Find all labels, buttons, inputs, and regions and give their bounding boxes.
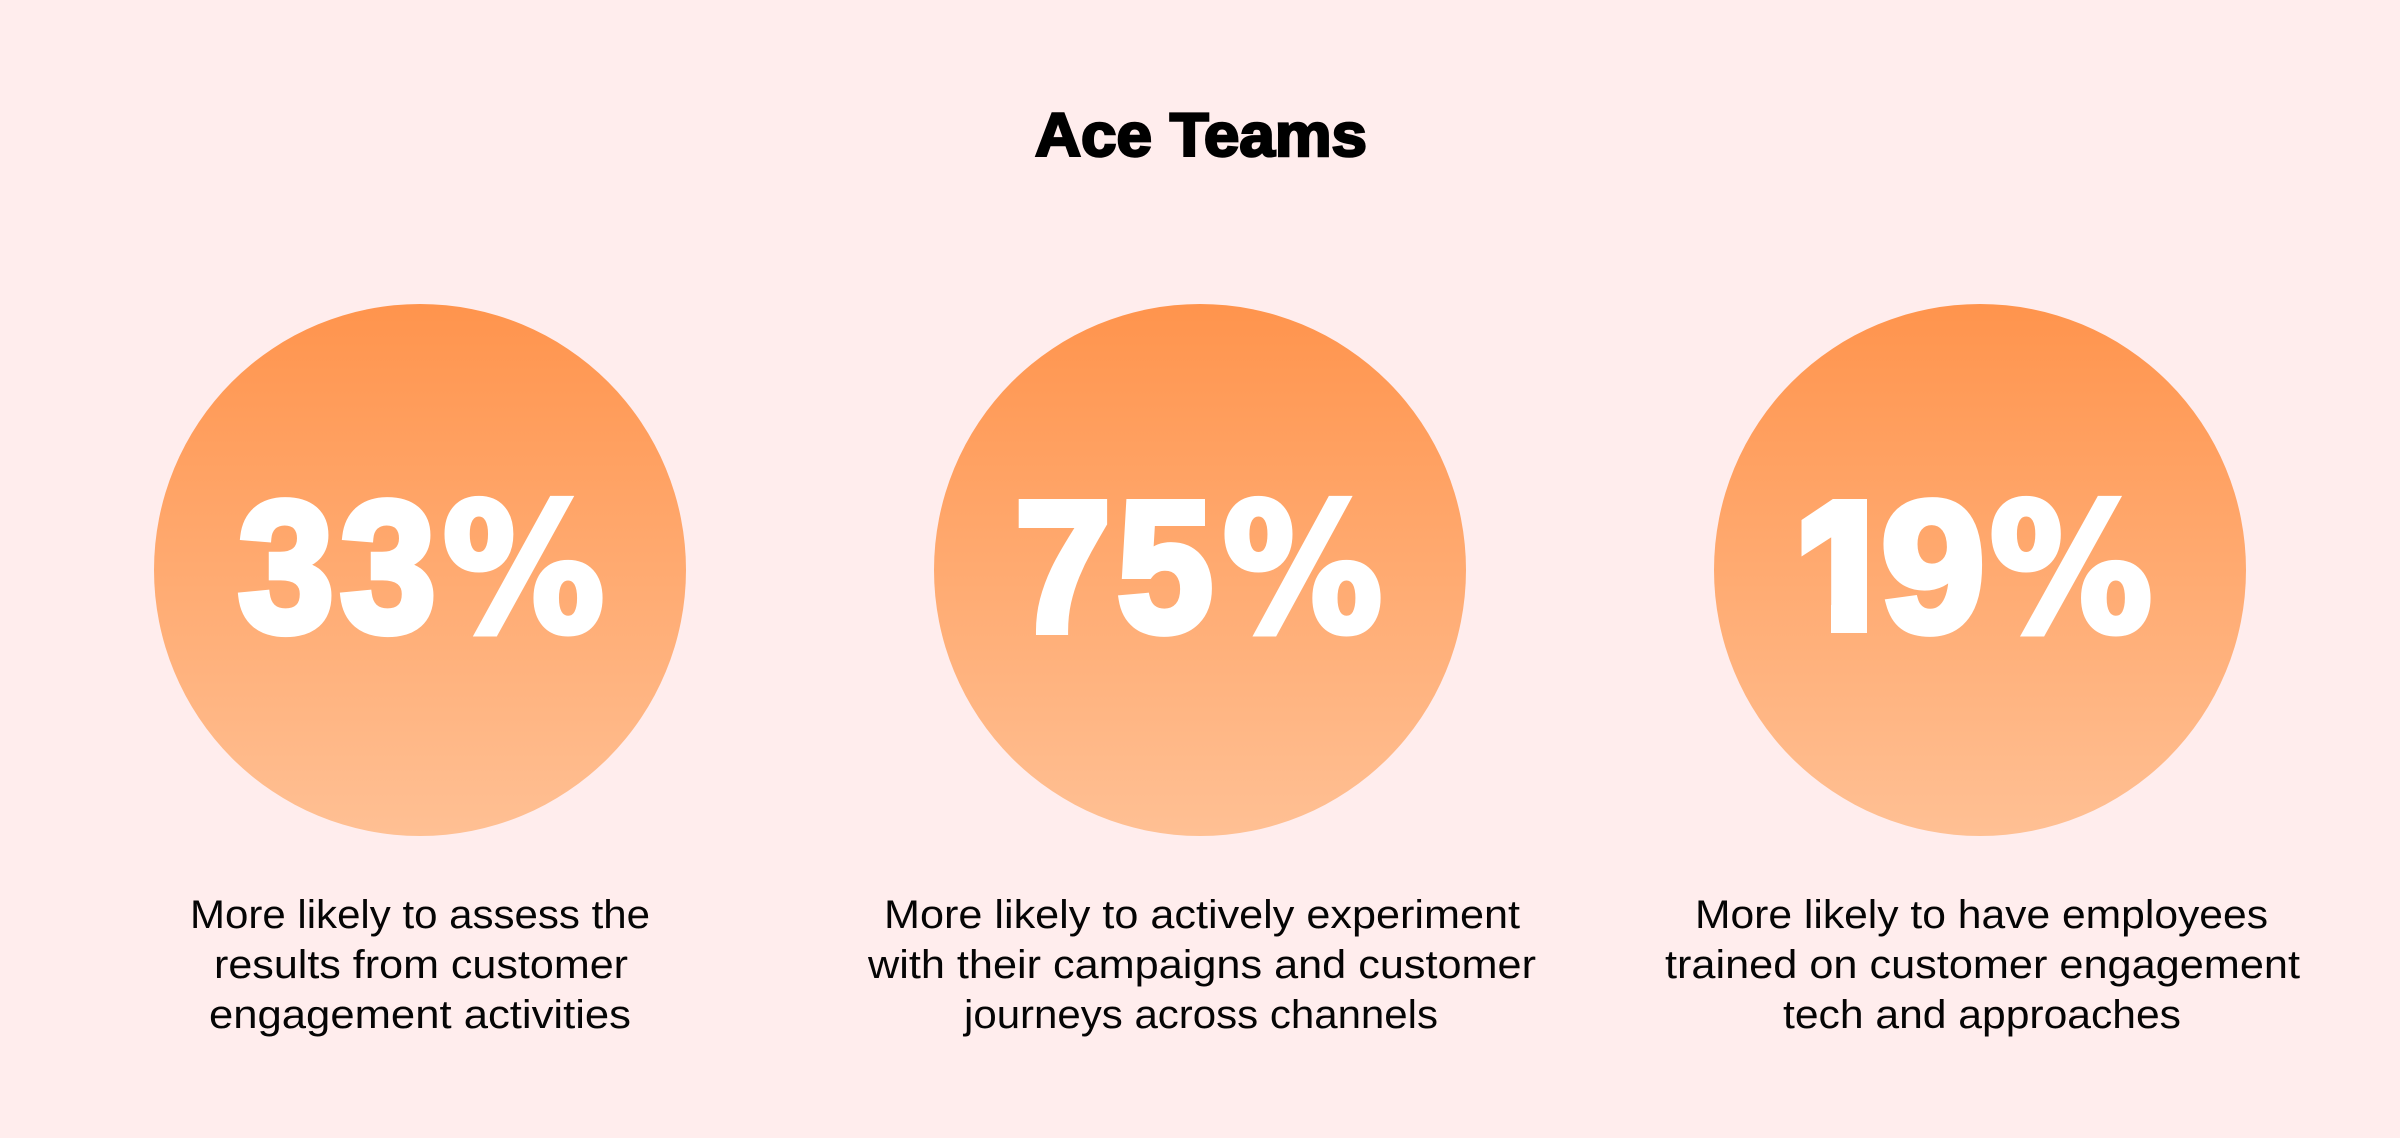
description: 19%: trained on customer engagement [1665, 943, 2300, 987]
description: 75% [867, 893, 1536, 1037]
circle: 19% [1714, 304, 2246, 836]
description: 75%: journeys across channels [963, 993, 1438, 1037]
number: 75%: % [1222, 466, 1383, 673]
number: 33% [238, 464, 605, 673]
number: 19%: 1 [1796, 464, 1896, 671]
description: 33%: engagement activities [209, 993, 631, 1037]
number: 33%: 3 [340, 464, 436, 671]
description: 33% [190, 893, 650, 1037]
number: 75%: 5 [1117, 464, 1213, 671]
description: 19% [1665, 893, 2300, 1037]
number: 33%: 3 [238, 464, 334, 671]
number: 19%: % [1989, 466, 2153, 673]
number: 75%: 7 [1015, 464, 1111, 671]
number: 33%: % [442, 466, 605, 673]
description: 33%: More likely to assess the [190, 893, 650, 937]
circle: 33% [154, 304, 686, 836]
number: 75% [1015, 464, 1383, 673]
panel: 19% stat [1665, 304, 2300, 1037]
description: 33%: results from customer [214, 943, 628, 987]
circle: 75% [934, 304, 1466, 836]
number: 19%: 9 [1881, 464, 1985, 671]
title: Ace Teams [1035, 101, 1367, 169]
panel: 33% stat [154, 304, 686, 1037]
number: 19% [1802, 496, 2151, 637]
description: 75%: with their campaigns and customer [867, 943, 1536, 987]
description: 19%: More likely to have employees [1695, 893, 2268, 937]
description: 75%: More likely to actively experiment [884, 893, 1520, 937]
description: 19%: tech and approaches [1783, 993, 2181, 1037]
panel: 75% stat [867, 304, 1536, 1037]
